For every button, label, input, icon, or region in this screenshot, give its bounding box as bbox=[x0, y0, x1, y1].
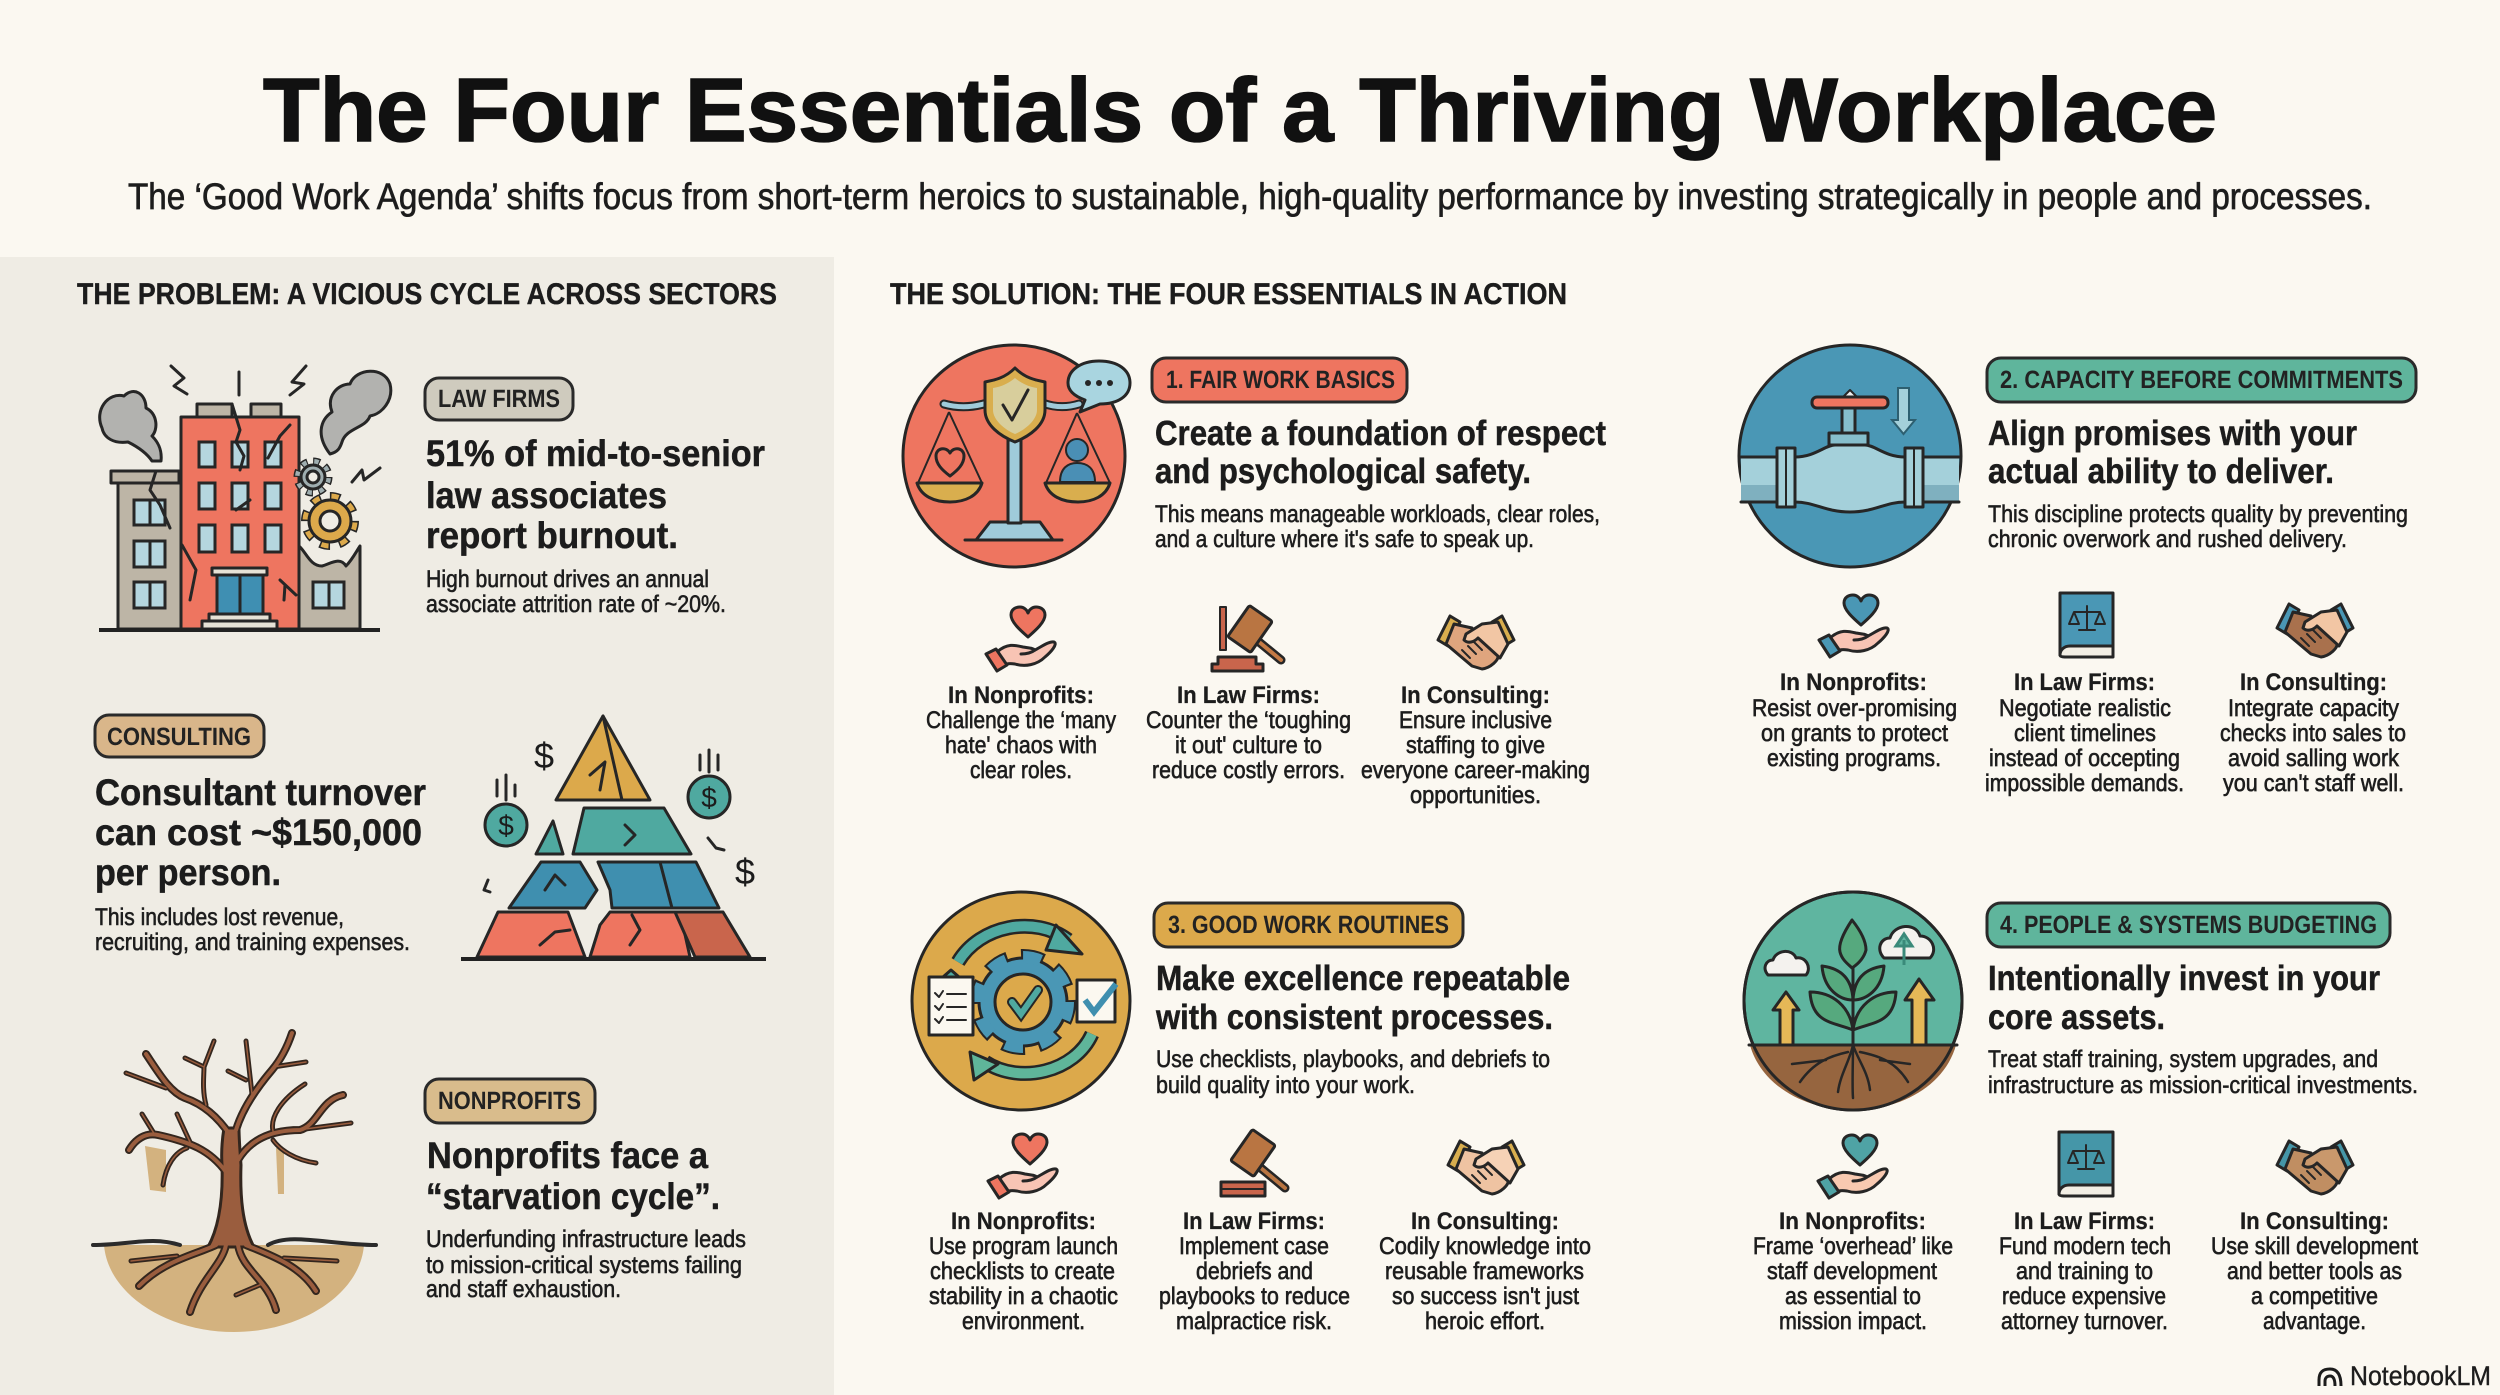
badge: 4 people and systems budgeting: 4. PEOPLE & SYSTEMS BUDGETING bbox=[2000, 911, 2377, 939]
text: nonprofits example: In Nonprofits: bbox=[1779, 1208, 1926, 1235]
badge: 4 people and systems budgeting bbox=[1987, 903, 2390, 947]
icon: gear cycle bbox=[912, 892, 1130, 1110]
text: nonprofits statistic: “starvation cycle”. bbox=[426, 1176, 720, 1217]
text: essential 4 description: Treat staff training, system upgrades, and bbox=[1988, 1046, 2378, 1073]
text: law firms example bbox=[1159, 1208, 1350, 1335]
text: essential 1 description bbox=[1155, 414, 1606, 553]
text: law firms example: attorney turnover. bbox=[2001, 1308, 2168, 1335]
heading: the problem: THE PROBLEM: A VICIOUS CYCLE ACROSS SECTORS bbox=[77, 278, 777, 311]
text: consulting example: advantage. bbox=[2263, 1308, 2366, 1335]
text: nonprofits statistic: and staff exhaustion. bbox=[426, 1276, 621, 1303]
panel: the problem bbox=[0, 257, 834, 1395]
icon: handshake bbox=[1438, 616, 1514, 669]
badge: nonprofits bbox=[425, 1079, 595, 1123]
text: nonprofits example: on grants to protect bbox=[1761, 720, 1948, 747]
text: consulting example: heroic effort. bbox=[1425, 1308, 1545, 1335]
panel: 3 good work routines bbox=[912, 892, 1591, 1335]
text: consulting example: In Consulting: bbox=[1411, 1208, 1559, 1235]
badge: law firms: LAW FIRMS bbox=[438, 385, 560, 413]
text: essential 3 description: with consistent processes. bbox=[1155, 998, 1553, 1037]
illustration: crumbling building bbox=[99, 366, 391, 630]
text: consulting example bbox=[1379, 1208, 1591, 1335]
icon: growing plant bbox=[1744, 892, 1962, 1110]
text: law firms statistic: report burnout. bbox=[426, 515, 678, 556]
icon: heart in hand bbox=[988, 1134, 1057, 1198]
icon: handshake bbox=[2277, 1141, 2353, 1194]
text: law firms example: Fund modern tech bbox=[1999, 1233, 2171, 1260]
icon: handshake bbox=[1448, 1141, 1524, 1194]
text: consulting example bbox=[2211, 1208, 2418, 1335]
text: law firms example: malpractice risk. bbox=[1176, 1308, 1332, 1335]
text: law firms example: Implement case bbox=[1179, 1233, 1329, 1260]
text: essential 1 description: This means manageable workloads, clear roles, bbox=[1155, 501, 1600, 528]
text: nonprofits statistic: to mission-critical systems failing bbox=[426, 1252, 742, 1279]
icon: heart in hand bbox=[986, 607, 1055, 671]
text: law firms statistic bbox=[426, 433, 765, 618]
text: law firms statistic: 51% of mid-to-senior bbox=[426, 433, 765, 474]
text: law firms statistic: law associates bbox=[426, 475, 667, 516]
text: nonprofits example: hate' chaos with bbox=[945, 732, 1097, 759]
text: essential 2 description: chronic overwork and rushed delivery. bbox=[1988, 526, 2347, 553]
text: law firms example: Negotiate realistic bbox=[1999, 695, 2171, 722]
text: consulting statistic: per person. bbox=[95, 852, 281, 893]
illustration: crumbling pyramid bbox=[461, 716, 766, 959]
icon: law book bbox=[2059, 1132, 2113, 1196]
text: nonprofits example: Use program launch bbox=[929, 1233, 1118, 1260]
badge: consulting bbox=[95, 715, 264, 757]
text: consulting statistic: can cost ~$150,000 bbox=[95, 812, 422, 853]
text: nonprofits example: Resist over-promising bbox=[1752, 695, 1957, 722]
text: law firms example: client timelines bbox=[2014, 720, 2156, 747]
text: essential 2 description: This discipline protects quality by preventing bbox=[1988, 501, 2408, 528]
text: consulting example: and better tools as bbox=[2227, 1258, 2402, 1285]
text: consulting example: avoid salling work bbox=[2228, 745, 2400, 772]
icon: gavel bbox=[1221, 1129, 1285, 1196]
text: consulting example: a competitive bbox=[2251, 1283, 2378, 1310]
text: consulting example: In Consulting: bbox=[2240, 669, 2387, 696]
text: law firms example: reduce costly errors. bbox=[1152, 757, 1345, 784]
text: essential 2 description: Align promises with your bbox=[1988, 414, 2357, 453]
text: nonprofits example: In Nonprofits: bbox=[951, 1208, 1096, 1235]
text: law firms statistic: associate attrition rate of ~20%. bbox=[426, 591, 726, 618]
text: essential 4 description: Intentionally invest in your bbox=[1988, 959, 2380, 998]
text: consulting statistic: recruiting, and training expenses. bbox=[95, 929, 410, 956]
text: consulting example: Ensure inclusive bbox=[1399, 707, 1552, 734]
text: nonprofits example: as essential to bbox=[1785, 1283, 1921, 1310]
icon: heart in hand bbox=[1818, 1135, 1887, 1198]
text: nonprofits statistic: Nonprofits face a bbox=[427, 1135, 708, 1176]
text: law firms example: reduce expensive bbox=[2002, 1283, 2166, 1310]
panel: 1 fair work basics bbox=[903, 345, 1606, 809]
panel: 4 people and systems budgeting bbox=[1744, 892, 2418, 1335]
badge: 2 capacity before commitments: 2. CAPACITY BEFORE COMMITMENTS bbox=[2000, 366, 2403, 394]
text: consulting example bbox=[2220, 669, 2406, 797]
badge: 3 good work routines: 3. GOOD WORK ROUTINES bbox=[1168, 911, 1449, 939]
text: law firms example bbox=[1146, 682, 1351, 784]
text: consulting example: everyone career-making bbox=[1361, 757, 1590, 784]
text: consulting example bbox=[1361, 682, 1590, 809]
title: The Four Essentials of a Thriving Workplace bbox=[263, 61, 2217, 161]
icon: pipe valve bbox=[1739, 345, 1961, 567]
text: essential 1 description: and a culture where it's safe to speak up. bbox=[1155, 526, 1534, 553]
text: law firms example: playbooks to reduce bbox=[1159, 1283, 1350, 1310]
badge: 1 fair work basics: 1. FAIR WORK BASICS bbox=[1166, 366, 1395, 394]
text: essential 4 description: core assets. bbox=[1988, 998, 2165, 1037]
badge: law firms bbox=[425, 378, 573, 420]
text: consulting example: Codily knowledge into bbox=[1379, 1233, 1591, 1260]
text: law firms example: In Law Firms: bbox=[2014, 669, 2155, 696]
text: consulting statistic bbox=[95, 772, 426, 956]
text: nonprofits example bbox=[1753, 1208, 1953, 1335]
text: consulting example: Integrate capacity bbox=[2228, 695, 2399, 722]
text: consulting example: staffing to give bbox=[1406, 732, 1545, 759]
text: nonprofits example: Challenge the ‘many bbox=[926, 707, 1116, 734]
text: law firms example: In Law Firms: bbox=[2014, 1208, 2155, 1235]
icon: handshake bbox=[2277, 604, 2353, 657]
text: law firms example: In Law Firms: bbox=[1183, 1208, 1325, 1235]
icon: law book bbox=[2060, 593, 2113, 657]
text: law firms example: In Law Firms: bbox=[1177, 682, 1320, 709]
text: nonprofits example: environment. bbox=[962, 1308, 1085, 1335]
text: nonprofits example: checklists to create bbox=[930, 1258, 1115, 1285]
text: nonprofits example: staff development bbox=[1767, 1258, 1937, 1285]
text: law firms example: instead of occepting bbox=[1989, 745, 2180, 772]
icon: scales and shield bbox=[903, 345, 1130, 567]
text: nonprofits example bbox=[929, 1208, 1118, 1335]
badge: 2 capacity before commitments bbox=[1987, 358, 2416, 402]
text: consulting statistic: Consultant turnover bbox=[95, 772, 426, 813]
text: law firms example: debriefs and bbox=[1196, 1258, 1313, 1285]
text: essential 3 description: Use checklists, playbooks, and debriefs to bbox=[1156, 1046, 1550, 1073]
text: nonprofits statistic bbox=[426, 1135, 746, 1303]
text: law firms statistic: High burnout drives an annual bbox=[426, 566, 709, 593]
text: law firms example: and training to bbox=[2016, 1258, 2153, 1285]
heading: the solution: THE SOLUTION: THE FOUR ESSENTIALS IN ACTION bbox=[890, 278, 1567, 311]
text: consulting statistic: This includes lost revenue, bbox=[95, 904, 344, 931]
text: nonprofits example: In Nonprofits: bbox=[948, 682, 1094, 709]
text: nonprofits example: existing programs. bbox=[1767, 745, 1941, 772]
text: essential 3 description: Make excellence repeatable bbox=[1156, 959, 1570, 998]
text: nonprofits example: In Nonprofits: bbox=[1780, 669, 1927, 696]
text: nonprofits example bbox=[1752, 669, 1957, 772]
illustration: crumbling pyramid: $ bbox=[701, 782, 717, 813]
text: nonprofits example: mission impact. bbox=[1779, 1308, 1927, 1335]
text: nonprofits example: Frame ‘overhead’ like bbox=[1753, 1233, 1953, 1260]
text: law firms example bbox=[1985, 669, 2184, 797]
badge: 1 fair work basics bbox=[1152, 358, 1407, 402]
text: law firms example: impossible demands. bbox=[1985, 770, 2184, 797]
badge: consulting: CONSULTING bbox=[107, 723, 251, 751]
icon: heart in hand bbox=[1819, 595, 1888, 657]
text: essential 3 description: build quality into your work. bbox=[1156, 1072, 1415, 1099]
text: essential 2 description bbox=[1988, 414, 2408, 553]
illustration: dying tree bbox=[93, 1033, 376, 1332]
text: consulting example: opportunities. bbox=[1410, 782, 1541, 809]
badge: nonprofits: NONPROFITS bbox=[438, 1087, 581, 1115]
illustration: crumbling pyramid: $ bbox=[534, 735, 554, 776]
text: nonprofits example: stability in a chaotic bbox=[929, 1283, 1118, 1310]
text: nonprofits example: clear roles. bbox=[970, 757, 1072, 784]
text: essential 2 description: actual ability to deliver. bbox=[1988, 452, 2334, 491]
panel: 2 capacity before commitments bbox=[1739, 345, 2416, 797]
text: essential 1 description: and psychological safety. bbox=[1155, 452, 1531, 491]
text: law firms example: it out' culture to bbox=[1175, 732, 1322, 759]
text: nonprofits statistic: Underfunding infrastructure leads bbox=[426, 1226, 746, 1253]
illustration: crumbling pyramid: $ bbox=[735, 851, 755, 892]
icon: gavel bbox=[1212, 605, 1281, 671]
text: law firms example bbox=[1999, 1208, 2171, 1335]
text: law firms example: Counter the ‘toughing bbox=[1146, 707, 1351, 734]
text: essential 4 description: infrastructure as mission-critical investments. bbox=[1988, 1072, 2418, 1099]
text: consulting example: you can't staff well. bbox=[2223, 770, 2404, 797]
logo: NotebookLM: NotebookLM bbox=[2350, 1361, 2491, 1391]
text: consulting example: Use skill development bbox=[2211, 1233, 2418, 1260]
text: consulting example: reusable frameworks bbox=[1385, 1258, 1584, 1285]
text: nonprofits example bbox=[926, 682, 1116, 784]
text: essential 3 description bbox=[1155, 959, 1570, 1099]
text: consulting example: checks into sales to bbox=[2220, 720, 2406, 747]
text: essential 1 description: Create a foundation of respect bbox=[1155, 414, 1606, 453]
text: consulting example: so success isn't just bbox=[1392, 1283, 1579, 1310]
text: consulting example: In Consulting: bbox=[1401, 682, 1550, 709]
text: consulting example: In Consulting: bbox=[2240, 1208, 2389, 1235]
text: essential 4 description bbox=[1988, 959, 2418, 1099]
illustration: crumbling pyramid: $ bbox=[498, 810, 514, 841]
badge: 3 good work routines bbox=[1154, 903, 1463, 947]
